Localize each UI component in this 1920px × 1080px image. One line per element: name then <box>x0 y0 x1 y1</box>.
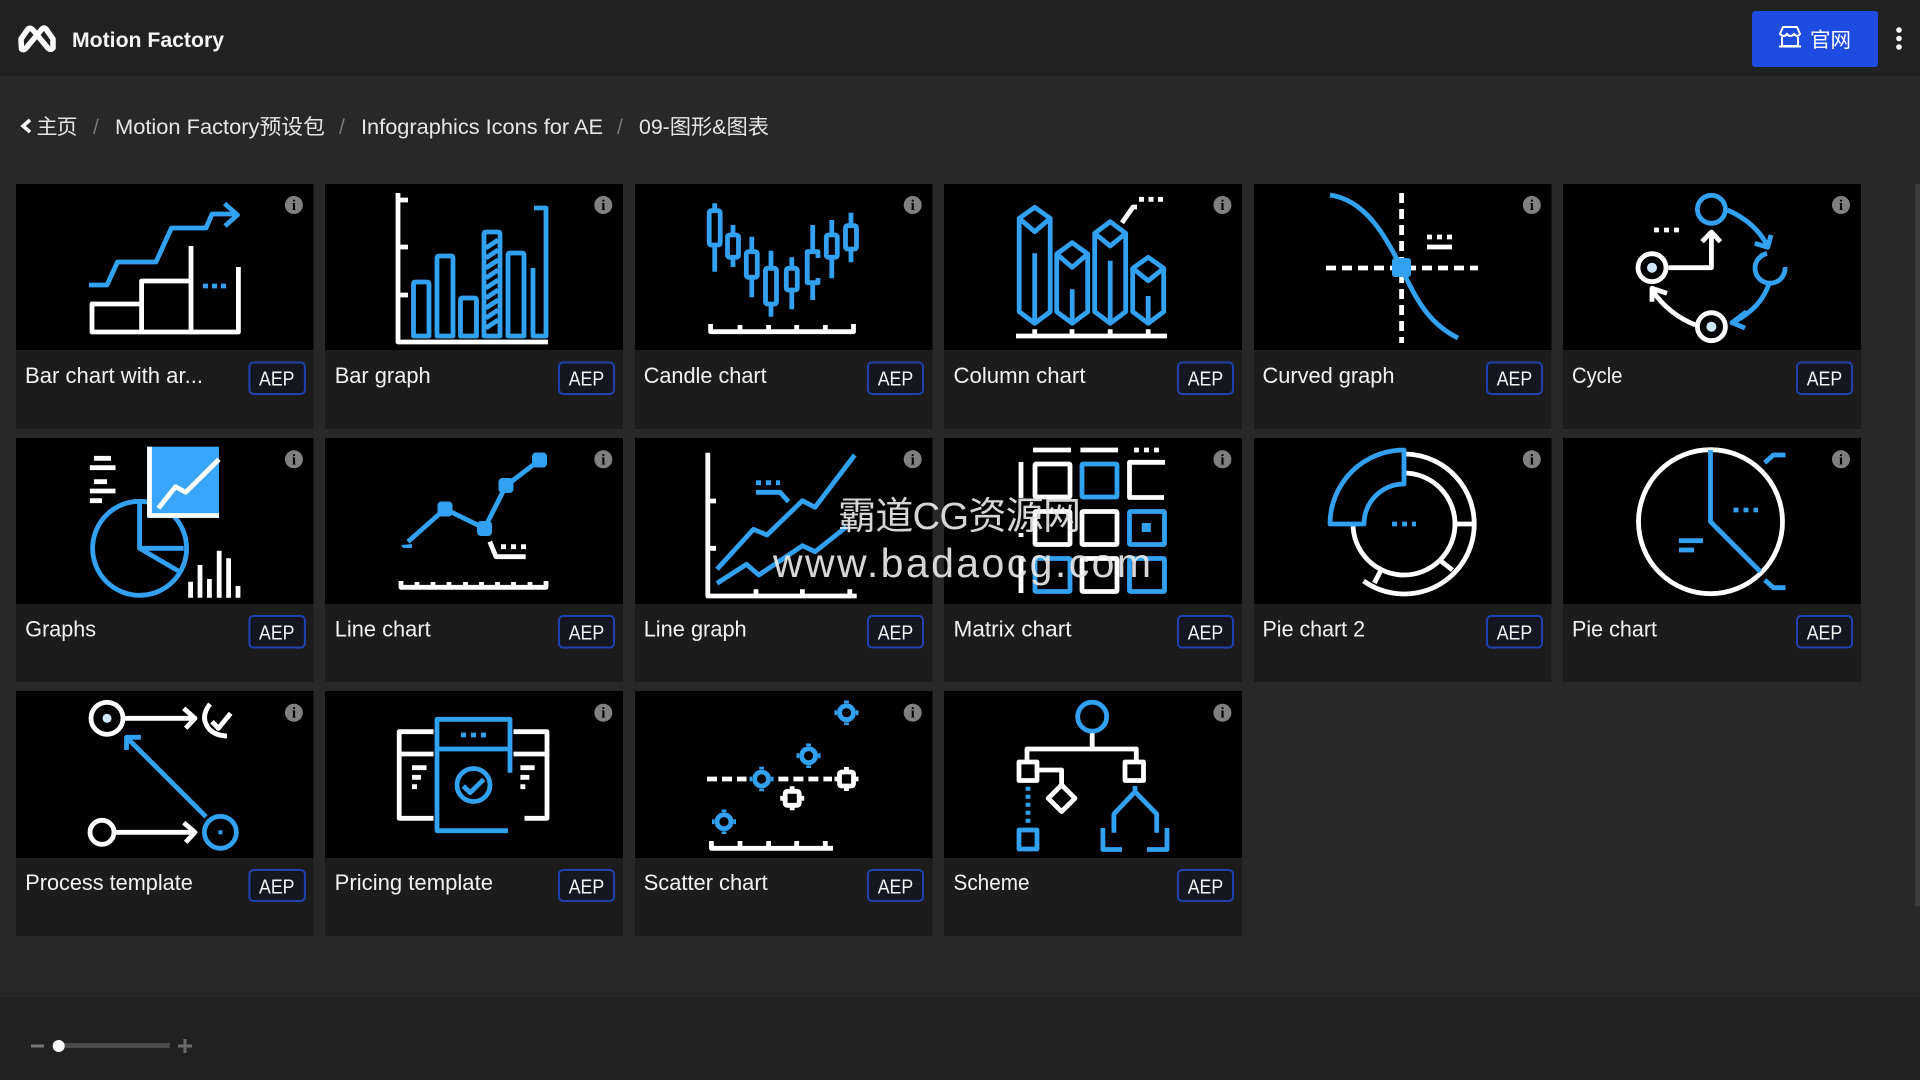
icon: graphs <box>90 447 238 598</box>
card: Cycle <box>1563 184 1861 429</box>
title: Pie chart <box>1572 616 1657 642</box>
badge: AEP: AEP <box>259 876 294 898</box>
info icon: i <box>601 706 605 722</box>
info icon: i <box>1530 198 1534 214</box>
title: Bar graph <box>335 363 431 388</box>
info icon: i <box>601 452 605 468</box>
info icon: i <box>1839 198 1843 214</box>
info icon <box>1832 196 1850 214</box>
thumbnail <box>325 184 623 350</box>
badge: AEP <box>1797 362 1852 394</box>
info icon: i <box>1839 452 1843 468</box>
badge: AEP <box>1178 362 1233 394</box>
title: Matrix chart <box>954 616 1072 642</box>
info icon: i <box>1220 452 1224 468</box>
badge: AEP <box>868 870 923 901</box>
thumbnail <box>1254 184 1552 350</box>
info icon: i <box>292 452 296 468</box>
breadcrumb: Motion Factory预设包 <box>115 116 325 139</box>
card: Column chart <box>944 184 1242 429</box>
card: Matrix chart <box>944 438 1242 682</box>
thumbnail <box>16 184 314 350</box>
badge: AEP <box>249 616 305 648</box>
card: Scheme <box>944 691 1242 936</box>
watermark: 霸道CG资源网 <box>838 496 1081 538</box>
title: Line graph <box>644 616 747 642</box>
info icon <box>285 196 303 214</box>
thumbnail <box>635 184 932 350</box>
thumbnail <box>944 438 1242 604</box>
thumbnail <box>325 691 623 858</box>
info icon: i <box>292 198 296 214</box>
logo <box>21 28 53 50</box>
info icon: i <box>1530 452 1534 468</box>
info icon: i <box>1220 706 1224 722</box>
icon: candle chart <box>709 203 856 332</box>
thumbnail <box>325 438 623 604</box>
badge: AEP <box>868 362 923 394</box>
badge: AEP: AEP <box>259 622 294 644</box>
icon: line graph <box>708 453 857 596</box>
badge: AEP: AEP <box>1188 622 1223 644</box>
badge: AEP: AEP <box>259 369 294 391</box>
button label: 官网 <box>1810 29 1851 52</box>
thumbnail <box>635 691 932 858</box>
official site button <box>1752 11 1878 67</box>
icon: scheme <box>1019 702 1167 850</box>
title: Line chart <box>335 616 431 642</box>
thumbnail <box>944 184 1242 350</box>
icon: bar graph <box>398 193 548 342</box>
badge: AEP: AEP <box>1497 622 1532 644</box>
card: Line chart <box>325 438 623 682</box>
icon: matrix chart <box>1021 450 1165 593</box>
breadcrumb: 主页 <box>36 116 78 139</box>
breadcrumb: / <box>93 116 99 139</box>
title: Candle chart <box>644 363 767 388</box>
card: Bar graph <box>325 184 623 429</box>
info icon <box>285 450 303 468</box>
thumbnail <box>944 691 1242 858</box>
info icon <box>1523 450 1541 468</box>
icon: store <box>1779 27 1801 46</box>
thumbnail <box>16 438 314 604</box>
icon: scatter chart <box>707 700 858 848</box>
info icon: i <box>292 706 296 722</box>
info icon <box>1523 196 1541 214</box>
card: Graphs <box>16 438 314 682</box>
watermark: www.badaocg.com <box>772 540 1151 586</box>
info icon <box>1832 450 1850 468</box>
title: Graphs <box>25 616 96 642</box>
title: Column chart <box>954 363 1086 388</box>
badge: AEP: AEP <box>569 369 604 391</box>
badge: AEP: AEP <box>1188 369 1223 391</box>
card: Line graph <box>635 438 932 682</box>
breadcrumb <box>23 116 769 139</box>
info icon: i <box>911 452 915 468</box>
badge: AEP: AEP <box>878 622 913 644</box>
title: Scatter chart <box>644 870 768 895</box>
badge: AEP <box>1178 870 1233 901</box>
title: Pricing template <box>335 870 493 895</box>
title: Scheme <box>954 870 1030 895</box>
icon: pie chart 2 <box>1330 450 1474 594</box>
thumbnail <box>16 691 314 858</box>
icon: process template <box>90 702 236 848</box>
badge: AEP <box>1487 616 1542 648</box>
card: Curved graph <box>1254 184 1552 429</box>
badge: AEP <box>1178 616 1233 648</box>
breadcrumb: / <box>339 116 345 139</box>
title: Process template <box>25 870 193 895</box>
badge: AEP: AEP <box>569 876 604 898</box>
menu dots <box>1896 27 1902 50</box>
info icon <box>594 704 612 722</box>
badge: AEP: AEP <box>1807 622 1842 644</box>
info icon <box>904 196 922 214</box>
info icon <box>594 450 612 468</box>
info icon <box>1213 704 1231 722</box>
icon: pie chart <box>1638 450 1786 594</box>
info icon <box>904 704 922 722</box>
scrollbar <box>1915 184 1920 906</box>
info icon <box>904 450 922 468</box>
breadcrumb: / <box>617 116 623 139</box>
title: Pie chart 2 <box>1262 616 1365 642</box>
badge: AEP <box>559 616 614 648</box>
info icon: i <box>1220 198 1224 214</box>
badge: AEP <box>1797 616 1852 648</box>
info icon: i <box>601 198 605 214</box>
badge: AEP <box>249 362 305 394</box>
info icon: i <box>911 706 915 722</box>
icon: pricing template <box>399 719 547 831</box>
thumbnail <box>1254 438 1552 604</box>
card: Candle chart <box>635 184 932 429</box>
info icon <box>285 704 303 722</box>
badge: AEP <box>1487 362 1542 394</box>
badge: AEP: AEP <box>1497 369 1532 391</box>
card: Bar chart with arrow <box>16 184 314 429</box>
badge: AEP <box>559 870 614 901</box>
brand name: Motion Factory <box>72 29 224 52</box>
icon: curved graph <box>1326 193 1478 343</box>
badge: AEP: AEP <box>878 369 913 391</box>
watermark <box>772 496 1151 586</box>
card: Pie chart 2 <box>1254 438 1552 682</box>
badge: AEP <box>868 616 923 648</box>
breadcrumb: 09-图形&图表 <box>639 116 769 139</box>
info icon <box>594 196 612 214</box>
card: Pie chart <box>1563 438 1861 682</box>
top bar <box>0 0 1920 76</box>
info icon <box>1213 450 1231 468</box>
card: Process template <box>16 691 314 936</box>
zoom slider <box>31 1039 192 1053</box>
badge: AEP: AEP <box>1807 369 1842 391</box>
thumbnail <box>1563 184 1861 350</box>
breadcrumb: Infographics Icons for AE <box>361 116 603 139</box>
info icon <box>1213 196 1231 214</box>
title: Cycle <box>1572 363 1622 388</box>
title: Curved graph <box>1262 363 1394 388</box>
badge: AEP: AEP <box>878 876 913 898</box>
icon: cycle <box>1638 195 1785 341</box>
icon: bar chart with arrow <box>89 204 238 332</box>
badge: AEP <box>249 870 305 901</box>
thumbnail <box>1563 438 1861 604</box>
icon: column chart <box>1016 199 1167 336</box>
footer bar <box>0 997 1920 1080</box>
icon: line chart <box>401 452 547 587</box>
card: Pricing template <box>325 691 623 936</box>
badge: AEP <box>559 362 614 394</box>
thumbnail <box>635 438 932 604</box>
card: Scatter chart <box>635 691 932 936</box>
info icon: i <box>911 198 915 214</box>
title: Bar chart with ar... <box>25 363 203 388</box>
badge: AEP: AEP <box>1188 876 1223 898</box>
badge: AEP: AEP <box>569 622 604 644</box>
